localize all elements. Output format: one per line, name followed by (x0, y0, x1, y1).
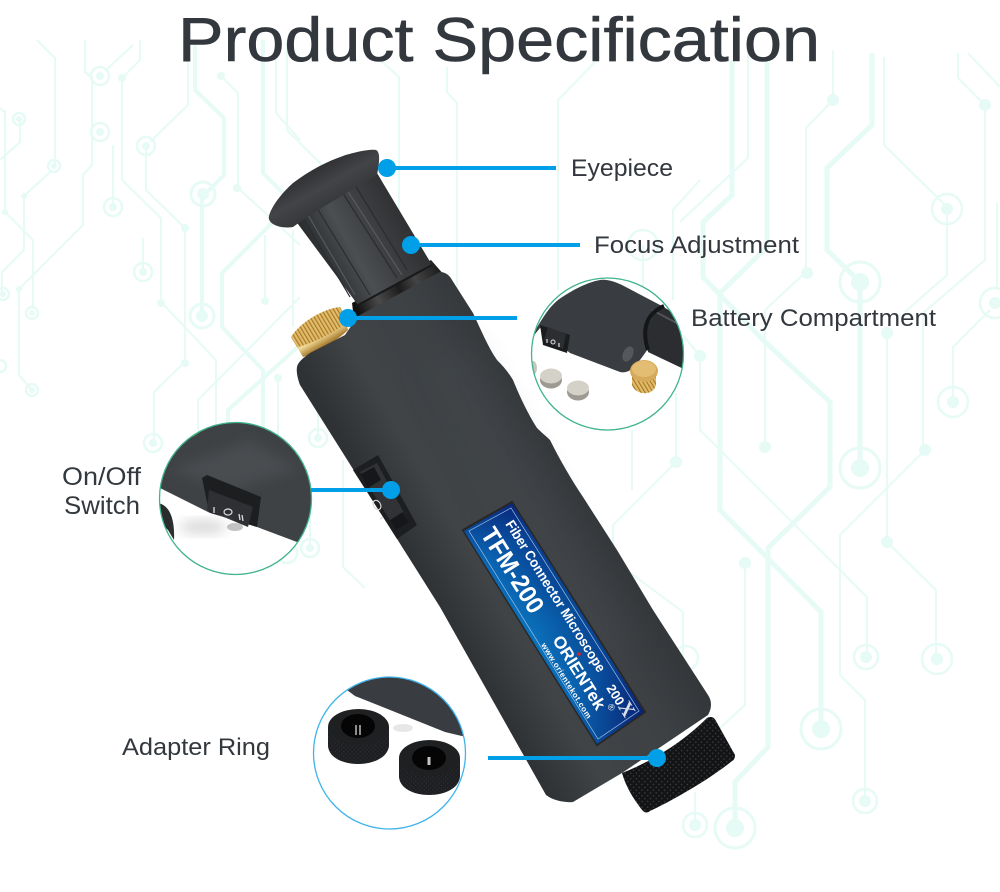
knurled end knob (622, 717, 735, 812)
callout: adapter ring (122, 734, 666, 767)
callout: eyepiece: Eyepiece (571, 155, 673, 182)
callout: focus adjustment: Focus Adjustment (594, 232, 799, 259)
label text: model: TFM-200 (475, 522, 550, 619)
callout: battery compartment: Battery Compartment (691, 305, 936, 332)
callout: adapter ring: Adapter Ring (122, 734, 270, 761)
inset: battery compartment (529, 278, 690, 430)
eyecup (269, 150, 379, 227)
callout: on/off switch: Switch (64, 492, 140, 520)
microscope (269, 150, 735, 813)
inset: on/off switch (155, 420, 315, 574)
inset: adapter rings (314, 677, 470, 829)
label text: brand: ORIENTek (549, 632, 610, 714)
callout: on/off switch (62, 463, 400, 520)
icon: brass knob (291, 307, 348, 357)
rocker switch (353, 455, 417, 539)
focus barrel (295, 173, 432, 305)
callout: eyepiece (378, 155, 673, 182)
label text: series: Fiber Connector Microscope (502, 517, 609, 675)
label text: magnification: 200X (602, 679, 640, 722)
product label plate (463, 502, 645, 745)
callout: on/off switch: On/Off (62, 463, 141, 491)
label text: website: www.orientekot.com (539, 640, 594, 721)
title: Product Specification (178, 6, 820, 75)
callout: battery compartment (339, 305, 936, 332)
callout: focus adjustment (402, 232, 799, 259)
label text: registered mark: ® (605, 702, 617, 713)
neck ring (352, 260, 445, 328)
main body (297, 272, 711, 802)
